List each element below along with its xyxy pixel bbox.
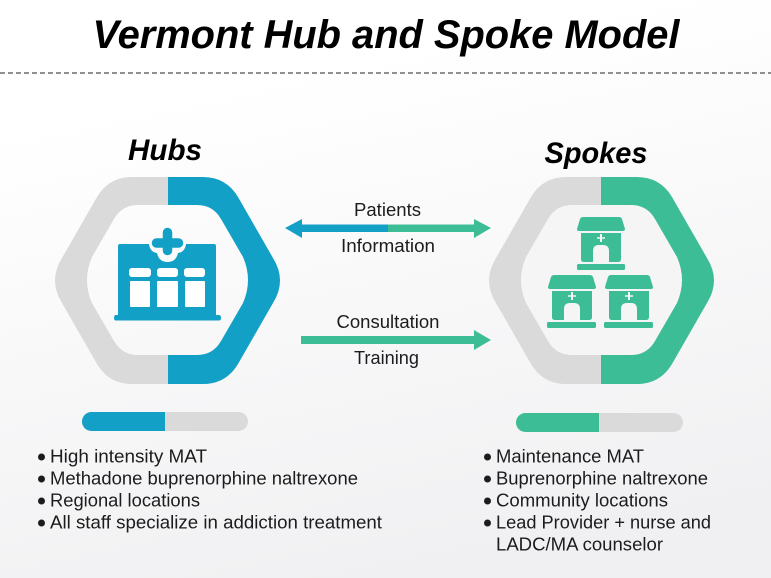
icon: hospital <box>114 232 221 320</box>
arrow: consultation and training <box>301 330 491 350</box>
clinic bottom right <box>604 275 653 328</box>
clinic bottom left <box>547 275 596 328</box>
spoke hexagon <box>489 177 714 384</box>
progress bar: hubs <box>82 412 248 431</box>
list: hubs features: High intensity MAT <box>50 446 207 466</box>
list: hubs features: Methadone buprenorphine naltrexone <box>50 468 358 488</box>
list: spokes features: Buprenorphine naltrexone <box>496 468 708 488</box>
label: Training: Training <box>354 348 419 368</box>
clinic top <box>577 217 625 270</box>
list: spokes features: LADC/MA counselor <box>496 534 663 554</box>
label: Information: Information <box>341 236 435 256</box>
title: Vermont Hub and Spoke Model <box>92 13 680 57</box>
label: Patients: Patients <box>354 200 421 220</box>
list: hubs features <box>38 446 382 532</box>
heading: Hubs: Hubs <box>128 134 202 167</box>
arrow: two-way patients and information <box>285 219 491 238</box>
list: spokes features: Lead Provider + nurse and <box>496 512 711 532</box>
list: spokes features <box>484 446 711 554</box>
icon: three clinics <box>547 217 653 328</box>
heading: Spokes: Spokes <box>544 137 648 170</box>
label: Consultation: Consultation <box>336 312 440 332</box>
list: spokes features: Community locations <box>496 490 668 510</box>
list: spokes features: Maintenance MAT <box>496 446 644 466</box>
hub hexagon <box>55 177 280 384</box>
list: hubs features: Regional locations <box>50 490 200 510</box>
list: hubs features: All staff specialize in addiction treatment <box>50 512 382 532</box>
progress bar: spokes <box>516 413 683 432</box>
